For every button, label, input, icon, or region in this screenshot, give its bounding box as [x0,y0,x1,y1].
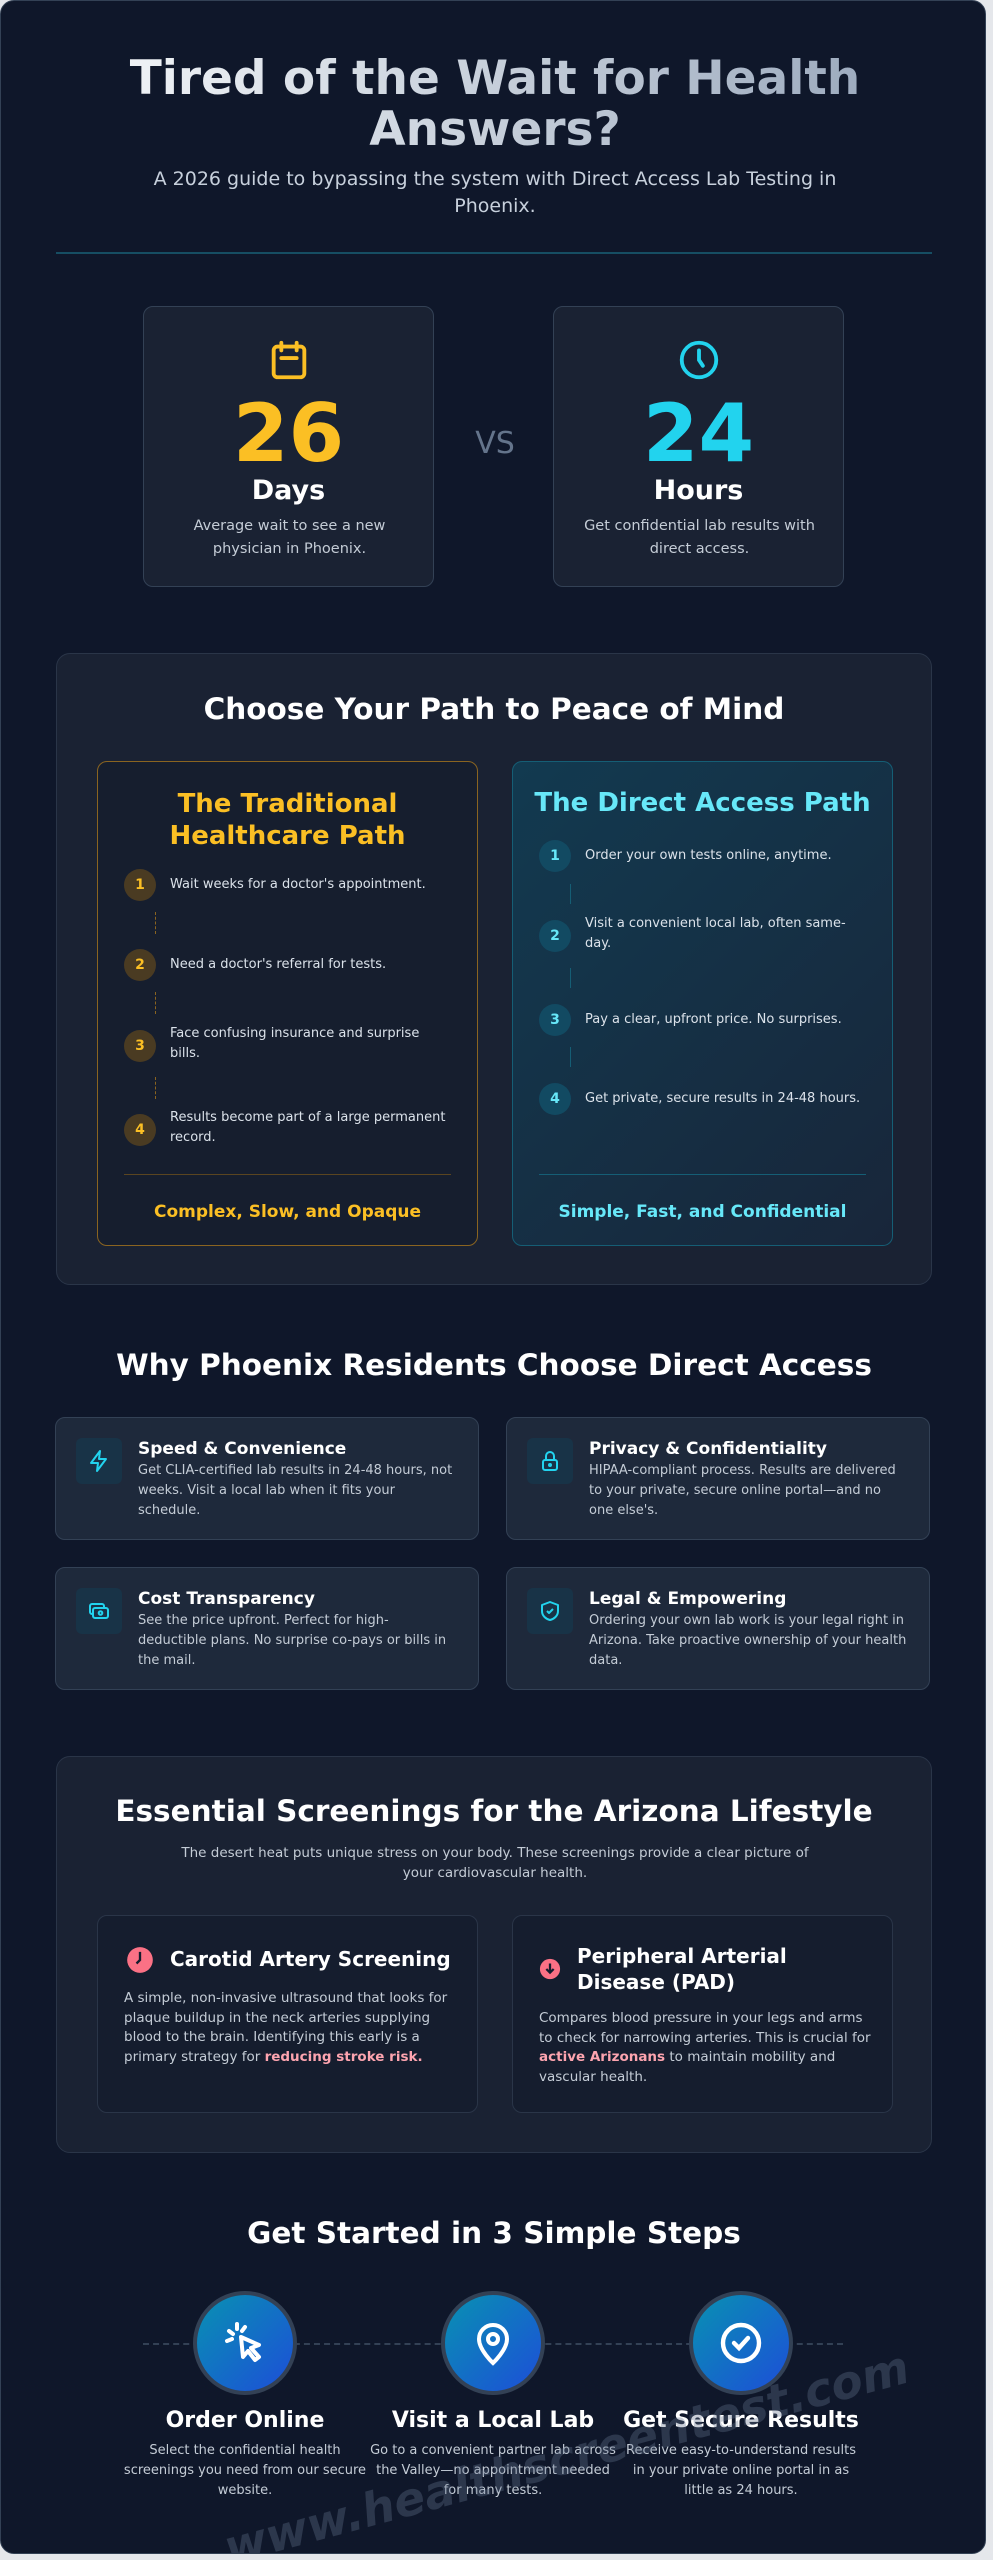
stat card: 26 days: 26 [233,387,344,480]
feature: privacy: HIPAA-compliant process. Results are delivered [589,1463,896,1478]
card: PAD: Compares blood pressure in your legs and arms to check for narrowing arteries. This is crucial for active Arizonans to maintain mobility and vascular health. [539,2010,871,2085]
card: direct access path: The Direct Access Path [534,788,871,818]
icon: clock [680,340,718,380]
step 3: results: in your private online portal in as [633,2463,849,2478]
card: traditional path: The Traditional [178,789,397,819]
feature: privacy: Privacy & Confidentiality [589,1439,827,1459]
step 1: order online: screenings you need from our secure [124,2463,366,2478]
feature: speed: Get CLIA-certified lab results in 24-48 hours, not [138,1463,452,1478]
card: carotid: A simple, non-invasive ultrasound that looks for plaque buildup in the neck arteries supplying blood to the brain. Identifying this early is a primary strategy for reducing stroke risk. [124,1990,447,2065]
feature: privacy: to your private, secure online portal—and no [589,1483,881,1498]
card: direct access path: 3 [550,1012,560,1028]
stat card: 24 hours [553,306,844,587]
step 2: visit lab: the Valley—no appointment needed [376,2463,610,2478]
stat card: 26 days [143,306,434,587]
icon: location pin [441,2291,545,2395]
card: traditional path: Face confusing insurance and surprise bills. [170,1026,419,1061]
icon: lock [527,1438,573,1484]
feature: legal: data. [589,1653,622,1668]
card: traditional path: Wait weeks for a doctor's appointment. [170,877,426,892]
step 2: visit lab: for many tests. [444,2483,542,2498]
step 3: results [623,2291,859,2498]
feature: speed: schedule. [138,1503,200,1518]
stat card: 26 days: Days [252,475,325,506]
card: direct access path: 4 [550,1091,560,1107]
feature: speed [55,1417,479,1540]
card: direct access path: Get private, secure results in 24-48 hours. [585,1091,860,1106]
card: traditional path: Need a doctor's referral for tests. [170,957,386,972]
card: carotid: Carotid Artery Screening [170,1947,451,1971]
step 1: order online [124,2291,366,2498]
card: direct access path [512,761,893,1246]
feature: privacy: one else's. [589,1503,658,1518]
step 1: order online: Select the confidential health [149,2443,341,2458]
icon: pink arrow [540,1958,560,1980]
feature: cost: See the price upfront. Perfect for high- [138,1613,389,1628]
card: traditional path: Results become part of a large permanent record. [170,1110,445,1145]
heading: get started: Get Started in 3 Simple Steps [247,2216,741,2250]
subtitle: A 2026 guide to bypassing the system with Direct Access Lab Testing in Phoenix. [154,168,836,217]
step 3: results: Get Secure Results [623,2408,859,2433]
panel: choose your path [56,653,932,1285]
step 3: results: little as 24 hours. [684,2483,798,2498]
icon: check circle [689,2291,793,2395]
card: traditional path: 2 [135,957,145,973]
card: traditional path: 3 [135,1038,145,1054]
icon: click [193,2291,297,2395]
card: traditional path: Complex, Slow, and Opaque [154,1202,421,1222]
card: direct access path: 2 [550,928,560,944]
vs label: VS [475,426,515,461]
icon: shield [527,1588,573,1634]
panel: essential screenings: The desert heat puts unique stress on your body. These screenings provide a clear picture of your cardiovascular health. [181,1845,809,1881]
card: direct access path: Visit a convenient local lab, often same-day. [585,916,846,951]
title [41,53,949,155]
heading: Choose Your Path to Peace of Mind [204,692,784,726]
card: traditional path [97,761,478,1246]
step 1: order online: Order Online [166,2408,324,2433]
feature: cost: Cost Transparency [138,1589,315,1609]
step 1: order online: website. [218,2483,272,2498]
card: direct access path: 1 [550,848,560,864]
panel: essential screenings [56,1756,932,2153]
card: direct access path: Simple, Fast, and Confidential [558,1202,846,1222]
icon: bolt [76,1438,122,1484]
card: traditional path: Healthcare Path [169,821,406,851]
feature: legal: Arizona. Take proactive ownership of your health [589,1633,906,1648]
card: traditional path: 1 [135,877,145,893]
feature: speed: Speed & Convenience [138,1439,346,1459]
step 3: results: Receive easy-to-understand results [626,2443,856,2458]
title: Answers? [369,102,621,157]
card: traditional path: 4 [135,1122,145,1138]
title: Tired of the Wait for Health [130,51,860,106]
feature: privacy [506,1417,930,1540]
feature: cost [55,1567,479,1690]
stat card: 24 hours: 24 [643,387,754,480]
icon: pink clock [127,1947,153,1973]
heading: Essential Screenings for the Arizona Lifestyle [115,1794,873,1828]
card: direct access path: Pay a clear, upfront price. No surprises. [585,1012,842,1027]
step 2: visit lab [370,2291,616,2498]
card: carotid [97,1915,478,2113]
card: direct access path: Order your own tests online, anytime. [585,848,832,863]
feature: speed: weeks. Visit a local lab when it fits your [138,1483,395,1498]
step 2: visit lab: Go to a convenient partner lab across [370,2443,616,2458]
heading: why phoenix: Why Phoenix Residents Choose Direct Access [116,1348,872,1382]
feature: cost: the mail. [138,1653,195,1668]
card: PAD: Peripheral Arterial [577,1944,787,1968]
icon: money [76,1588,122,1634]
feature: legal: Ordering your own lab work is your legal right in [589,1613,904,1628]
stat card: 24 hours: Get confidential lab results with direct access. [584,518,815,557]
stat card: 26 days: Average wait to see a new physician in Phoenix. [194,518,385,557]
step 2: visit lab: Visit a Local Lab [392,2408,594,2433]
icon: calendar [272,340,306,380]
feature: cost: deductible plans. No surprise co-pays or bills in [138,1633,446,1648]
stat card: 24 hours: Hours [654,475,743,506]
feature: legal: Legal & Empowering [589,1589,786,1609]
card: PAD: Disease (PAD) [577,1970,735,1994]
card: PAD [512,1915,893,2113]
feature: legal [506,1567,930,1690]
